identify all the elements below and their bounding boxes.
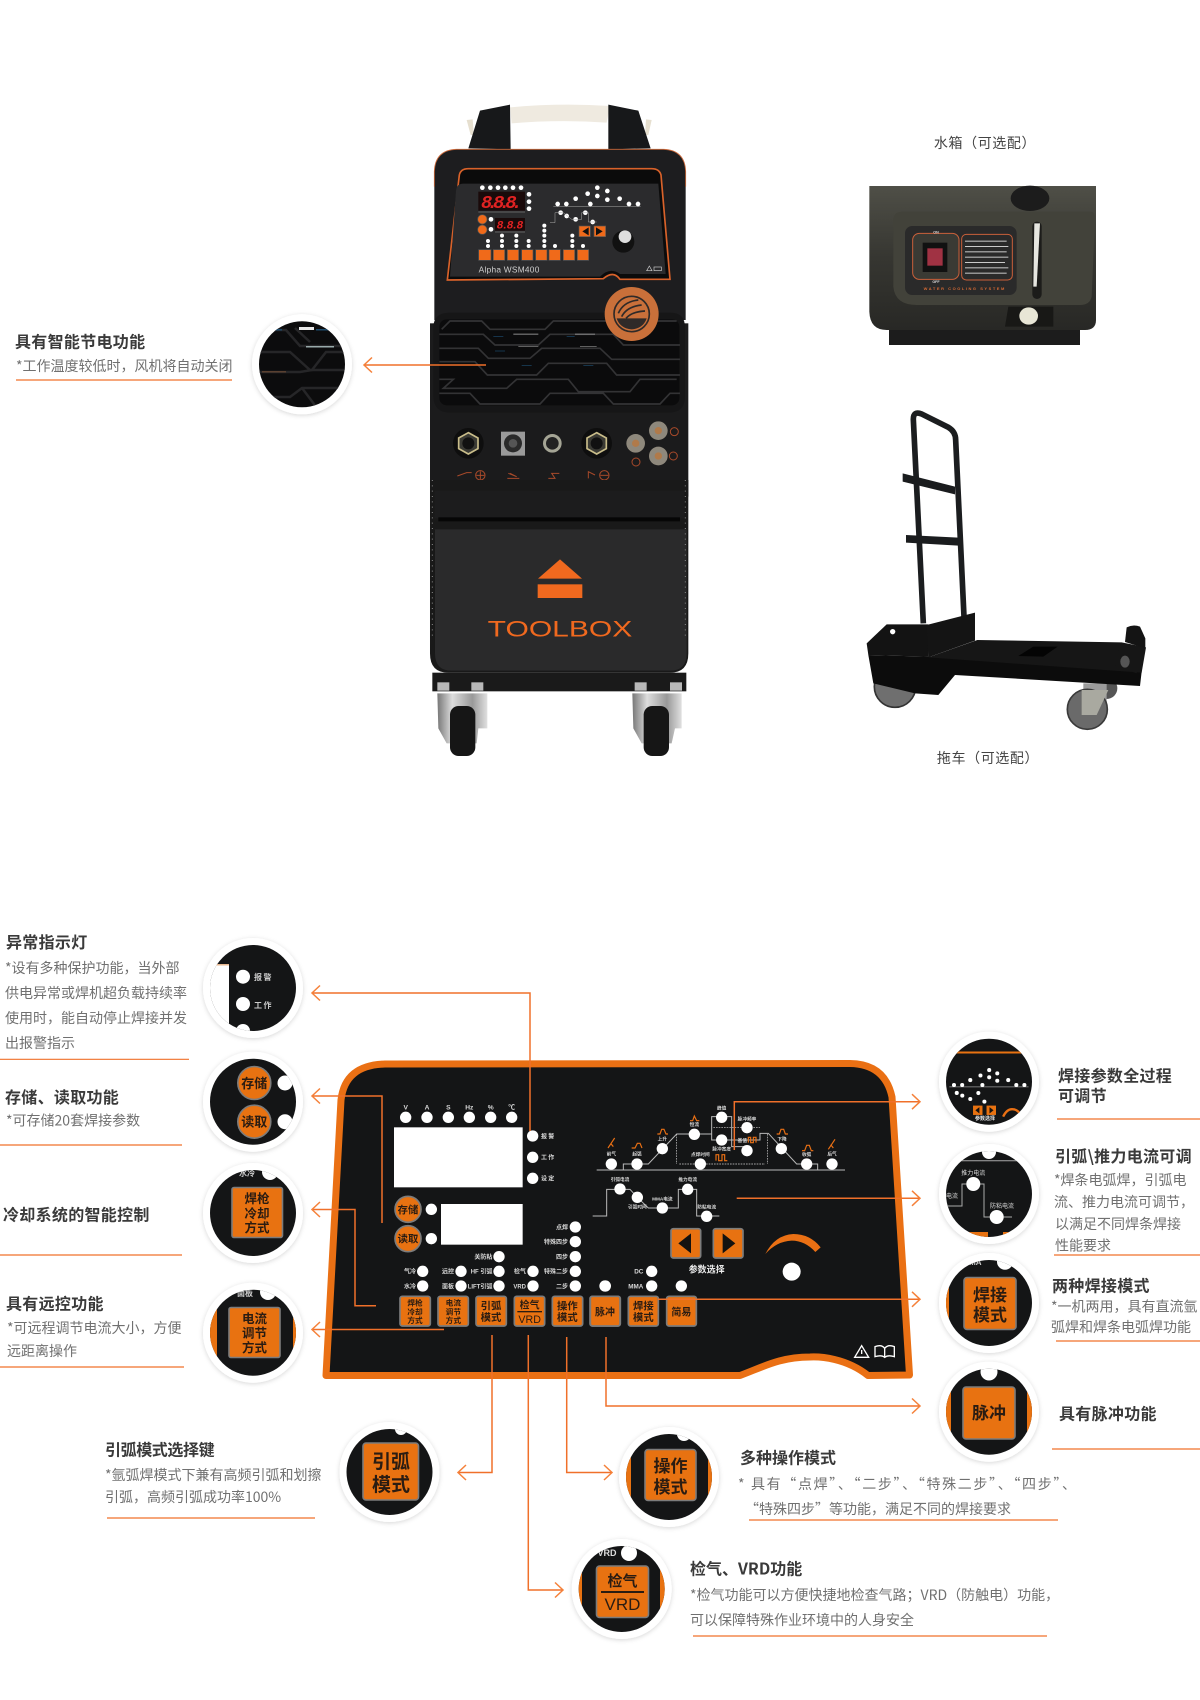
callout: operation modes — [567, 1337, 1076, 1527]
water tank photo: WATER COOLING SYSTEM — [924, 286, 1005, 291]
inset: 存储 — [241, 1076, 267, 1091]
inset: vent close-up — [252, 314, 352, 414]
machine upper half: 8.8.8 — [497, 221, 524, 233]
panel right side controls — [590, 1104, 894, 1357]
parameter buttons: 参数选择 — [689, 1264, 725, 1275]
function buttons: 模式 — [481, 1311, 502, 1324]
secondary display — [441, 1204, 523, 1245]
function buttons: 检气 — [520, 1299, 540, 1312]
description: 弧焊和焊条电弧焊功能 — [1051, 1317, 1191, 1337]
inset: 面板 — [237, 1288, 253, 1298]
description: *检气功能可以方便快捷地检查气路；VRD（防触电）功能， — [690, 1585, 1059, 1605]
description: *可存储20套焊接参数 — [6, 1110, 140, 1130]
leader arrow — [312, 986, 530, 1131]
memory buttons: 存储 — [398, 1203, 418, 1216]
inset — [939, 1253, 1039, 1353]
top housing — [434, 149, 686, 320]
red displays — [478, 192, 525, 211]
inset: 参数选择 — [975, 1115, 995, 1122]
description — [690, 1585, 1059, 1630]
description — [738, 1474, 1076, 1519]
caption: trolley: 拖车（可选配） — [937, 748, 1039, 768]
inset: 焊枪 — [244, 1191, 270, 1206]
inset: 水冷 — [239, 1168, 255, 1178]
inset — [340, 1422, 440, 1522]
callout: memory — [0, 1052, 382, 1223]
heading: 检气、VRD功能 — [690, 1556, 802, 1580]
heading: 异常指示灯 — [6, 929, 88, 953]
callout: arc mode key — [105, 1335, 492, 1522]
description: 引弧，高频引弧成功率100% — [105, 1487, 281, 1507]
description — [105, 1465, 322, 1507]
function buttons: 模式 — [557, 1311, 578, 1324]
lower buttons — [590, 1296, 696, 1326]
water tank photo: OFF — [932, 280, 940, 284]
process labels: 峰值 — [717, 1104, 727, 1111]
heading: 具有脉冲功能 — [1059, 1400, 1157, 1424]
function labels: 检气 — [514, 1268, 526, 1276]
heading: 焊接参数全过程 — [1058, 1062, 1172, 1086]
memory buttons — [395, 1196, 421, 1252]
process labels: 引弧电流 — [611, 1176, 630, 1183]
callout: cooling control — [0, 1163, 376, 1306]
function buttons: 电流 — [446, 1298, 461, 1308]
water tank photo — [869, 186, 1096, 345]
inset: 检气 — [607, 1572, 638, 1590]
inset: 模式 — [372, 1474, 410, 1496]
warning icon — [855, 1346, 869, 1357]
function labels: 特殊四步 — [544, 1238, 568, 1246]
control panel diagram — [326, 1064, 910, 1376]
inset: 引弧 — [372, 1450, 410, 1473]
handle — [510, 105, 610, 123]
process LEDs — [599, 1112, 838, 1292]
inset — [619, 1427, 719, 1527]
arrow — [364, 358, 486, 372]
process labels: 收弧 — [802, 1151, 812, 1158]
function labels: 远控 — [442, 1268, 454, 1276]
function buttons: 方式 — [446, 1315, 461, 1325]
toolbox logo — [538, 559, 582, 579]
description: *焊条电弧焊，引弧电 — [1054, 1170, 1187, 1190]
inset: 推力电流 — [961, 1169, 985, 1177]
function buttons: 冷却 — [407, 1306, 423, 1316]
logo badge — [605, 287, 659, 341]
leader arrow — [734, 1094, 920, 1150]
inset — [203, 1283, 303, 1383]
leader arrow — [458, 1335, 492, 1480]
inset: 冷却 — [244, 1206, 270, 1221]
inset: VRD — [605, 1595, 640, 1614]
knob — [612, 231, 634, 253]
description: 流、推力电流可调节， — [1054, 1192, 1194, 1212]
leader arrow — [312, 1202, 376, 1306]
machine upper half: 8.8.8. — [481, 192, 523, 214]
callout: arc and thrust current — [737, 1143, 1200, 1256]
process curve — [593, 1117, 845, 1216]
inset — [203, 1052, 303, 1152]
output connectors — [453, 421, 668, 465]
description: 供电异常或焊机超负载持续率 — [5, 983, 187, 1003]
inset: 模式 — [654, 1478, 688, 1497]
function labels: 水冷 — [404, 1282, 416, 1290]
description — [1051, 1296, 1198, 1337]
process labels: 下降 — [777, 1136, 787, 1143]
parameter buttons — [671, 1229, 743, 1275]
description: 以满足不同焊条焊接 — [1055, 1214, 1181, 1234]
description — [7, 1318, 182, 1361]
inset: 读取 — [241, 1114, 267, 1130]
function labels: 二步 — [556, 1282, 568, 1290]
function labels: HF 引弧 — [471, 1268, 492, 1276]
main display — [394, 1127, 523, 1187]
status labels: 报警 — [541, 1132, 556, 1140]
status labels: 设定 — [541, 1175, 556, 1183]
heading: 具有智能节电功能 — [15, 328, 145, 352]
inset: 调节 — [242, 1326, 267, 1340]
description: *设有多种保护功能，当外部 — [5, 958, 180, 978]
heading: 可调节 — [1058, 1082, 1107, 1106]
callout: smart power saving — [15, 314, 486, 414]
inset: VRD — [597, 1548, 617, 1558]
inset: MMA — [962, 1258, 982, 1267]
lower buttons: 模式 — [633, 1311, 654, 1324]
function labels: 面板 — [442, 1282, 454, 1290]
description: *可远程调节电流大小，方便 — [7, 1318, 182, 1338]
inset: 脉冲 — [972, 1404, 1006, 1423]
control recess — [447, 169, 670, 280]
leader arrow — [567, 1337, 612, 1480]
process labels: 起弧 — [632, 1150, 642, 1157]
inset: 操作 — [654, 1457, 688, 1476]
process labels: 点焊时间 — [691, 1151, 710, 1158]
leader arrow — [312, 1088, 382, 1223]
caption: water tank: 水箱（可选配） — [934, 133, 1036, 153]
description — [5, 958, 187, 1053]
callout: remote control — [0, 1283, 444, 1383]
machine upper half — [430, 105, 688, 497]
unit labels: ℃ — [508, 1103, 515, 1111]
inset — [939, 1144, 1039, 1244]
manual icon — [875, 1346, 894, 1357]
function buttons: 引弧 — [481, 1299, 502, 1312]
unit labels — [403, 1103, 515, 1111]
leader arrow — [737, 1191, 920, 1206]
process labels: 脉冲频率 — [738, 1116, 757, 1123]
function buttons — [400, 1296, 620, 1326]
description: 远距离操作 — [7, 1341, 77, 1361]
process labels: 引弧时间 — [628, 1204, 647, 1211]
memory buttons: 读取 — [398, 1233, 419, 1246]
process labels: 推力电流 — [678, 1176, 697, 1183]
function buttons: VRD — [518, 1314, 541, 1326]
inset: 方式 — [244, 1220, 270, 1235]
inset: 报警 — [254, 972, 273, 982]
process labels — [607, 1104, 837, 1211]
MMA labels — [628, 1269, 644, 1290]
status labels: 工作 — [541, 1154, 556, 1162]
function buttons: 操作 — [557, 1299, 578, 1312]
lower buttons: 简易 — [671, 1305, 691, 1318]
description: *氩弧焊模式下兼有高频引弧和划擦 — [105, 1465, 322, 1485]
function labels: 四步 — [556, 1253, 568, 1261]
description — [1054, 1170, 1194, 1256]
callout: abnormal indicator — [0, 929, 530, 1131]
function labels: 关防粘 — [474, 1253, 492, 1261]
unit labels: Hz — [465, 1104, 474, 1111]
description: * 具有“点焊”、“二步”、“特殊二步”、“四步”、 — [738, 1474, 1076, 1494]
description: *一机两用，具有直流氩 — [1051, 1296, 1198, 1316]
function buttons: 方式 — [407, 1315, 423, 1325]
process labels: 上升 — [658, 1136, 667, 1143]
callout: gas check and VRD — [528, 1335, 1059, 1639]
unit labels: % — [488, 1104, 494, 1111]
function labels: 点焊 — [556, 1223, 568, 1231]
connector symbols — [457, 428, 678, 480]
function labels: 气冷 — [404, 1268, 416, 1276]
welding machine product image — [430, 105, 688, 756]
status labels — [541, 1132, 556, 1183]
front-panel indicator LEDs — [480, 185, 640, 248]
inset: 电流 — [242, 1311, 267, 1326]
unit labels: V — [403, 1104, 408, 1111]
description: 性能要求 — [1055, 1236, 1111, 1256]
inset: 工作 — [254, 1000, 273, 1010]
knob arc — [765, 1234, 821, 1254]
function buttons: 调节 — [446, 1306, 461, 1316]
panel left side controls — [394, 1103, 620, 1326]
function labels: LIFT引弧 — [468, 1282, 492, 1290]
trolley photo — [867, 413, 1146, 729]
process labels: 后气 — [827, 1150, 837, 1157]
description: 出报警指示 — [5, 1033, 75, 1053]
description: “特殊四步”等功能，满足不同的焊接要求 — [745, 1499, 1011, 1519]
callout: two welding modes — [658, 1253, 1200, 1353]
process labels: MMA电流 — [652, 1196, 673, 1203]
callout: pulse — [606, 1337, 1200, 1462]
body lower — [430, 323, 688, 497]
inset: 模式 — [973, 1306, 1007, 1325]
leader arrow — [606, 1337, 920, 1414]
lower buttons: 焊接 — [633, 1299, 654, 1312]
unit labels: S — [446, 1104, 451, 1111]
heading: 多种操作模式 — [740, 1444, 836, 1468]
process labels: 前气 — [607, 1150, 616, 1157]
casters — [437, 693, 487, 743]
lower buttons: 脉冲 — [595, 1305, 615, 1318]
heading: 引弧模式选择键 — [105, 1436, 215, 1460]
heading — [1058, 1062, 1172, 1106]
description: 可以保障特殊作业环境中的人身安全 — [690, 1610, 914, 1630]
function labels — [404, 1223, 568, 1290]
inset — [203, 938, 303, 1040]
vent grille — [433, 313, 685, 413]
orange buttons — [478, 215, 606, 260]
function labels: 特殊二步 — [544, 1268, 568, 1276]
heading: 两种焊接模式 — [1052, 1272, 1150, 1296]
inset: 焊接 — [973, 1286, 1007, 1305]
machine lower half — [430, 480, 688, 756]
MMA labels: DC — [634, 1269, 644, 1276]
heading: 引弧\推力电流可调 — [1055, 1143, 1192, 1167]
process labels: 基值 — [738, 1137, 747, 1144]
callout: weld parameters — [734, 1032, 1200, 1150]
inset: 防粘电流 — [990, 1202, 1014, 1210]
leader arrow — [528, 1335, 563, 1598]
process labels: 恒流 — [690, 1121, 699, 1128]
description: 使用时，能自动停止焊接并发 — [5, 1008, 187, 1028]
model name: Alpha WSM400 — [479, 264, 540, 274]
water tank photo: ON — [933, 230, 939, 234]
panel outline — [326, 1064, 910, 1376]
inset — [939, 1362, 1039, 1462]
inset — [572, 1539, 672, 1639]
heading: 存储、读取功能 — [5, 1084, 119, 1108]
caster bar — [432, 673, 686, 691]
LEDs — [400, 1112, 611, 1292]
inset: 电流 — [946, 1192, 958, 1200]
unit labels: A — [425, 1104, 430, 1111]
process labels: 防粘电流 — [697, 1204, 716, 1211]
function buttons: 脉冲 — [595, 1305, 615, 1318]
process waveform icons — [608, 1116, 835, 1161]
process labels: 脉冲宽度 — [712, 1146, 731, 1153]
inset: 方式 — [242, 1340, 267, 1355]
machine lower half: TOOLBOX — [488, 617, 633, 642]
inset — [203, 1163, 303, 1263]
heading: 冷却系统的智能控制 — [3, 1202, 150, 1226]
MMA labels: MMA — [628, 1283, 644, 1290]
inset — [939, 1032, 1039, 1132]
description: *工作温度较低时，风机将自动关闭 — [16, 356, 233, 376]
function labels: VRD — [513, 1284, 527, 1290]
leader arrow — [658, 1292, 920, 1307]
function buttons: 焊枪 — [407, 1298, 423, 1308]
leader arrow — [312, 1322, 444, 1337]
heading: 具有远控功能 — [6, 1290, 104, 1314]
